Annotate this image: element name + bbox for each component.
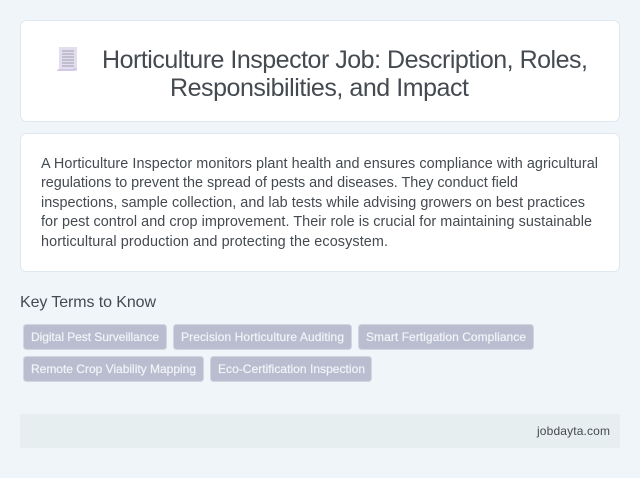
tag: Eco-Certification Inspection: [210, 356, 372, 382]
description text: horticultural production and protecting the ecosystem.: [41, 234, 388, 250]
footer bar: [20, 414, 620, 448]
title: Responsibilities, and Impact: [170, 74, 469, 102]
description text: [41, 156, 598, 250]
panel: title card: [20, 20, 620, 122]
tag: Remote Crop Viability Mapping: [24, 356, 204, 382]
tag: Eco-Certification Inspection: Eco-Certification Inspection: [218, 362, 365, 376]
footer source: jobdayta.com: [536, 424, 610, 438]
description text: A Horticulture Inspector monitors plant health and ensures compliance with agricultural: [41, 156, 598, 172]
heading: key terms: Key Terms to Know: [20, 294, 156, 311]
description text: regulations to prevent the spread of pests and diseases. They conduct field: [41, 175, 518, 191]
tag: Precision Horticulture Auditing: Precision Horticulture Auditing: [181, 330, 344, 344]
icon: document scroll: [57, 47, 77, 71]
title: Horticulture Inspector Job: Description, Roles,: [102, 46, 588, 74]
tag: Smart Fertigation Compliance: [358, 324, 534, 350]
tag: Precision Horticulture Auditing: [174, 324, 352, 350]
title: [102, 46, 588, 102]
description text: inspections, sample collection, and lab tests while advising growers on best practices: [41, 195, 585, 211]
tag list: [24, 324, 534, 382]
tag: Smart Fertigation Compliance: Smart Fertigation Compliance: [366, 330, 526, 344]
description text: for pest control and crop improvement. Their role is crucial for maintaining sustainable: [41, 214, 592, 230]
tag: Digital Pest Surveillance: [24, 324, 166, 350]
panel: description card: [20, 134, 620, 272]
tag: Digital Pest Surveillance: Digital Pest Surveillance: [31, 330, 159, 344]
tag: Remote Crop Viability Mapping: Remote Crop Viability Mapping: [31, 362, 196, 376]
